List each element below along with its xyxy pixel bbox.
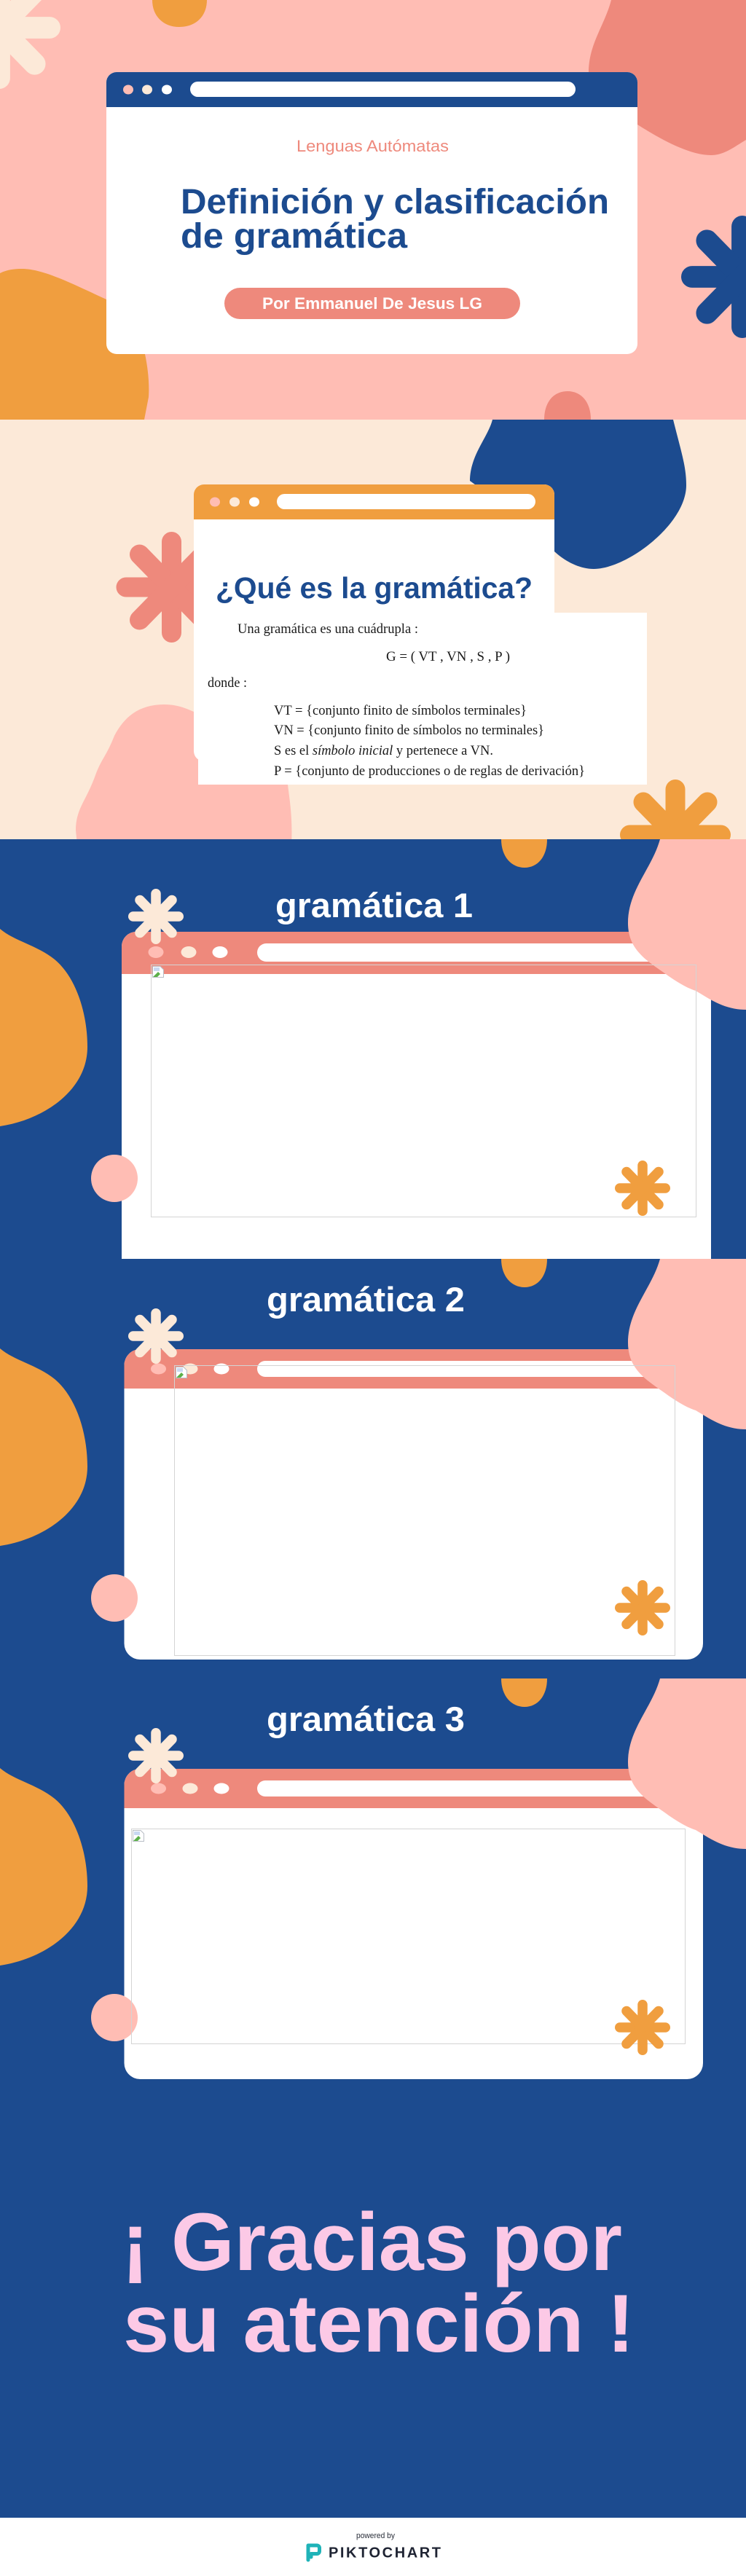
footer bbox=[0, 2518, 746, 2576]
icon: cream star bbox=[133, 1313, 178, 1359]
blob: pink right bbox=[628, 839, 746, 1010]
image placeholder bbox=[131, 1829, 685, 2044]
blob: blue top right bbox=[470, 420, 686, 569]
heading: gramática 2 bbox=[267, 1280, 465, 1319]
panel: definition text: G = ( VT , VN , S , P ) bbox=[386, 650, 510, 664]
blob: orange top drop bbox=[501, 839, 547, 868]
blob: pink right bbox=[628, 1678, 746, 1849]
section: what is grammar bbox=[0, 420, 746, 880]
section: cover bbox=[0, 0, 746, 420]
section: blue background bbox=[0, 839, 746, 2518]
closing message: su atención ! bbox=[123, 2278, 635, 2369]
author pill bbox=[224, 288, 520, 319]
panel: definition text: VT = {conjunto finito de símbolos terminales} bbox=[274, 704, 527, 718]
blob: orange left bbox=[0, 269, 149, 420]
image placeholder bbox=[152, 965, 696, 1217]
panel: definition text bbox=[198, 613, 647, 785]
blob: pink right bbox=[628, 1259, 746, 1429]
panel: definition text: S es el símbolo inicial y pertenece a VN. bbox=[274, 744, 493, 758]
blob: pink oval bbox=[91, 1155, 138, 1202]
blob: orange left bbox=[0, 1768, 87, 1966]
panel: window 1 bbox=[122, 932, 711, 1259]
section: gramática 2 bbox=[0, 1259, 746, 1660]
panel: window 2 bbox=[124, 1349, 703, 1660]
closing message: ¡ Gracias por bbox=[122, 2196, 622, 2288]
panel: definition text: VN = {conjunto finito de símbolos no terminales} bbox=[274, 723, 544, 738]
icon: orange star bbox=[620, 2005, 665, 2050]
text: subject label: Lenguas Autómatas bbox=[297, 137, 449, 155]
icon: cream star bbox=[133, 894, 178, 939]
section: gramática 3 bbox=[0, 1678, 746, 2079]
icon: salmon star bbox=[126, 542, 217, 632]
icon: orange star bbox=[629, 790, 721, 880]
blob: salmon top right bbox=[589, 0, 746, 155]
panel: definition window bbox=[194, 484, 554, 761]
panel: window 3 bbox=[124, 1769, 703, 2079]
author pill: Por Emmanuel De Jesus LG bbox=[262, 294, 482, 313]
panel: cover window bbox=[106, 72, 637, 354]
icon: orange star bbox=[620, 1166, 665, 1211]
title bbox=[181, 183, 609, 256]
title: Definición y clasificación bbox=[181, 183, 609, 221]
blob: salmon bottom drop bbox=[544, 391, 591, 420]
image placeholder bbox=[175, 1365, 675, 1655]
icon: blue star bbox=[692, 227, 746, 327]
blob: orange top drop bbox=[501, 1678, 547, 1707]
icon: logo mark bbox=[308, 2545, 319, 2560]
text: powered by: powered by bbox=[356, 2532, 395, 2540]
closing message bbox=[122, 2196, 635, 2369]
blob: orange left bbox=[0, 1348, 87, 1546]
blob: orange top drop bbox=[501, 1259, 547, 1287]
blob: orange left bbox=[0, 929, 87, 1126]
icon: cream star bbox=[133, 1733, 178, 1778]
panel: definition text: Una gramática es una cuádrupla : bbox=[237, 622, 418, 637]
icon: cream star bbox=[0, 0, 50, 78]
blob: orange top drop bbox=[152, 0, 207, 27]
panel: definition text: P = {conjunto de producciones o de reglas de derivación} bbox=[274, 764, 585, 779]
blob: pink bottom left bbox=[76, 704, 291, 845]
panel: definition text: donde : bbox=[208, 676, 247, 691]
heading: gramática 1 bbox=[275, 886, 473, 924]
blob: pink oval bbox=[91, 1994, 138, 2041]
title: de gramática bbox=[181, 217, 407, 256]
section: gramática 1 bbox=[0, 839, 746, 1259]
blob: pink oval bbox=[91, 1574, 138, 1622]
heading: ¿Qué es la gramática? bbox=[216, 571, 533, 605]
heading: gramática 3 bbox=[267, 1700, 465, 1738]
icon: orange star bbox=[620, 1585, 665, 1630]
text: logo wordmark: PIKTOCHART bbox=[329, 2545, 441, 2561]
